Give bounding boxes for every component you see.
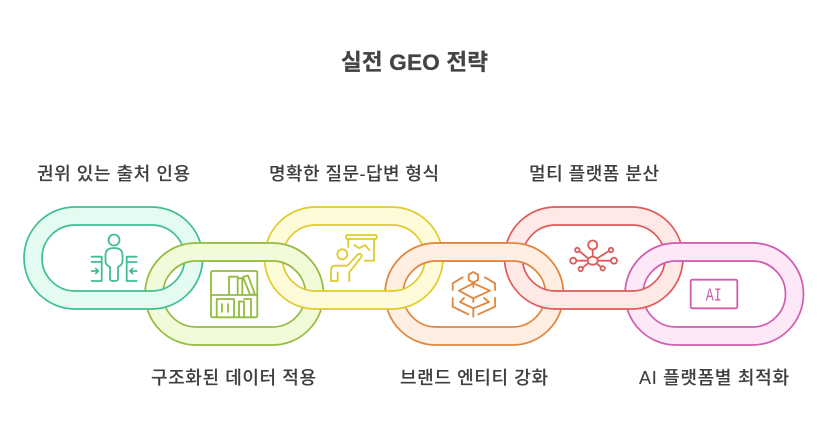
link 4 upper overlap [387, 242, 562, 276]
icon: bookshelf [211, 271, 257, 317]
link 5: red [514, 216, 674, 300]
label: structured data: 구조화된 데이터 적용 [151, 368, 316, 388]
link 1: teal [33, 216, 194, 300]
icon: person with inward arrows [92, 234, 137, 281]
label: multi-platform distribution: 멀티 플랫폼 분산 [529, 164, 659, 184]
label: brand entity: 브랜드 엔티티 강화 [400, 368, 548, 388]
link 2: lime [154, 252, 314, 336]
infographic: chain of strategies [23, 50, 804, 386]
label: authoritative sources: 권위 있는 출처 인용 [37, 164, 190, 184]
link 3: yellow [274, 216, 434, 300]
link 2 upper overlap [147, 242, 322, 276]
link 6 upper overlap [627, 242, 802, 276]
label: AI platform optimisation: AI 플랫폼별 최적화 [639, 368, 789, 388]
label: clear Q&A format: 명확한 질문-답변 형식 [269, 164, 439, 184]
icon: presenter at board [331, 235, 377, 281]
icon: AI chip label [691, 280, 737, 308]
icon: layered hexagon [453, 272, 495, 317]
icon: network nodes [570, 240, 617, 271]
title: 실전 GEO 전략 [341, 50, 488, 75]
link 6: pink [634, 252, 794, 336]
icon: AI chip label: AI [706, 287, 722, 307]
link 4: orange [394, 252, 554, 336]
